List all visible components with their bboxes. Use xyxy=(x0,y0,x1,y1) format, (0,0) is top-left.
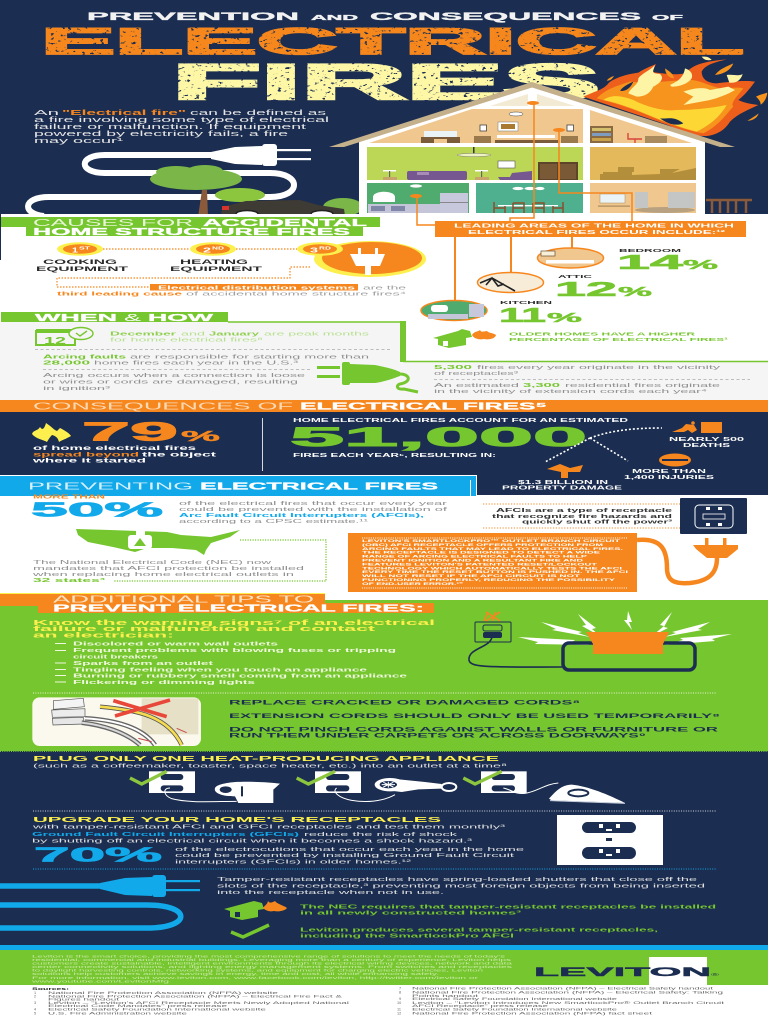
sources: Leviton – "Leviton Introduces New SmartlockPro® Outlet Branch Circuit xyxy=(412,1001,726,1005)
stat text: spread beyond: where it started xyxy=(30,458,147,464)
cord safety tips: DO NOT PINCH CORDS AGAINST WALLS OR FURNITURE OR xyxy=(229,726,719,734)
title word: fires: FIRES xyxy=(172,54,600,110)
stat text: spread beyond xyxy=(30,446,216,464)
sources: 2 xyxy=(34,994,36,998)
area: attic: 12 xyxy=(555,279,617,301)
sources: National Fire Protection Association (NFPA) website xyxy=(48,991,278,995)
stat text: spread beyond: of home electrical fires xyxy=(33,446,198,452)
sources: 5 xyxy=(34,1011,36,1015)
Leviton SmartlockPro box: THE RECEPTACLE IS DESIGNED TO DETECT A WIDE xyxy=(362,550,601,555)
intro text: failure or malfunction. If equipment xyxy=(34,124,306,131)
stat: 50 percent: 50% xyxy=(31,500,164,522)
sources: AFCI Receptacle" press release xyxy=(412,1004,548,1008)
sources xyxy=(32,987,726,1016)
AFCI text xyxy=(179,501,448,525)
heading: upgrade receptacles: UPGRADE YOUR HOME'S RECEPTACLES xyxy=(33,815,442,824)
stat: 51,000 fires xyxy=(290,418,629,459)
Leviton SmartlockPro box xyxy=(348,533,637,592)
heading: plug only one: PLUG ONLY ONE HEAT-PRODUCING APPLIANCE xyxy=(33,754,500,763)
basement storage xyxy=(590,147,696,180)
tamper-resistant text: slots of the receptacle,³ preventing most foreign objects from being inserted xyxy=(217,884,705,890)
kitchen xyxy=(367,183,469,213)
vicinity fire stats: An estimated xyxy=(434,383,519,389)
AFCI text: Arc Fault Circuit Interrupters (AFCIs), xyxy=(179,513,425,519)
Leviton SmartlockPro box: PREVENT IGNITION AND A RESULTANT FIRE AND xyxy=(362,558,583,562)
callout text: third leading cause xyxy=(57,292,182,298)
outcome: property damage xyxy=(502,464,624,492)
GFCI text: Ground Fault Circuit Interrupters (GFCIs) xyxy=(32,832,299,838)
dotted arrows xyxy=(545,428,662,462)
company description: For more information, visit www.leviton.com, www.facebook.com/leviton, http://twitter.com/leviton or xyxy=(32,976,480,980)
panel: Leviton footer xyxy=(0,945,768,985)
icon: third-place plug badge xyxy=(314,241,426,277)
panel: preventing electrical fires xyxy=(0,475,747,592)
house wall xyxy=(359,87,705,216)
warning signs heading: failure or malfunction and contact xyxy=(33,626,377,633)
warning signs list: Frequent problems with blowing fuses or tripping xyxy=(73,648,396,654)
Leviton SmartlockPro box: RANGE OF ARCING ELECTRICAL FAULTS TO HELP xyxy=(362,554,588,559)
leading areas banner: ELECTRICAL FIRES OCCUR INCLUDE:¹² xyxy=(468,229,725,236)
heading: when and how: WHEN xyxy=(35,312,117,324)
NEC text: mandates that AFCI protection be installed xyxy=(33,566,304,572)
GFCI text: by shutting off an electrical circuit when it becomes a shock hazard.³ xyxy=(32,838,472,844)
attic xyxy=(490,94,575,106)
heading: causes: CAUSES FOR xyxy=(33,217,194,229)
arcing faults text: Arcing faults xyxy=(43,354,126,360)
Leviton products text xyxy=(300,928,659,940)
vicinity fire stats: in the vicinity of extension cords each year⁴ xyxy=(434,389,709,395)
heading: upgrade receptacles: with tamper-resistant AFCI and GFCI receptacles and test them monthly³ xyxy=(30,824,505,830)
heading: additional tips xyxy=(0,593,434,614)
arcing faults text: are responsible for starting more than xyxy=(130,354,369,360)
area: kitchen: KITCHEN xyxy=(500,300,554,305)
icon: calendar xyxy=(36,328,93,347)
older homes note xyxy=(509,331,729,343)
heading: upgrade receptacles xyxy=(30,815,505,830)
sources: Electrical Safety Foundation International website xyxy=(412,1008,617,1012)
panel: consequences xyxy=(0,400,768,495)
warning signs list xyxy=(55,642,407,686)
heading: causes: HOME STRUCTURE FIRES xyxy=(33,226,350,238)
icon: outlet with iron xyxy=(463,771,625,803)
company description: solutions help customers achieve savings in energy, time and cost, all while enhancing safety. xyxy=(32,972,439,976)
stat text: spread beyond: the object xyxy=(142,452,216,458)
heading: causes xyxy=(1,217,380,238)
area: kitchen: 11 xyxy=(499,305,546,327)
panel: when and how xyxy=(0,312,768,400)
warning signs heading xyxy=(33,620,435,640)
callout text: are the xyxy=(363,285,406,291)
area: attic xyxy=(478,272,652,301)
NEC text: when replacing home electrical outlets in xyxy=(30,572,294,578)
rank: second xyxy=(170,242,263,273)
GFCI text: reduce the risk of shock xyxy=(304,832,458,838)
heading: causes: ACCIDENTAL xyxy=(203,217,368,229)
icon: white cord and plug xyxy=(28,144,311,216)
AFCI definition: quickly shut off the power³ xyxy=(522,520,673,526)
icon: cyan cord and plug xyxy=(0,875,200,928)
heading: consequences xyxy=(0,400,768,412)
vicinity fire stats: of receptacles³ xyxy=(434,371,519,377)
sources: Points handout xyxy=(412,994,480,998)
Leviton SmartlockPro box: FEATURES LEVITON'S PATENTED RESET/LOCKOUT xyxy=(362,561,598,566)
study xyxy=(590,110,692,143)
dining room xyxy=(476,183,583,213)
Leviton SmartlockPro box: TECHNOLOGY WHICH AUTOMATICALLY TESTS THE AFCI xyxy=(362,565,622,570)
map: united states xyxy=(76,529,240,555)
icon: outlet with hair dryer xyxy=(297,771,456,802)
arcing faults text: home fires each year in the U.S.³ xyxy=(94,360,299,366)
sources: National Fire Protection Association (NFPA) fact sheet xyxy=(412,1012,654,1016)
warning signs heading: an electrician: xyxy=(33,632,174,640)
sources: Electrical Safety Foundation International website xyxy=(48,1008,266,1012)
heading: consequences: CONSEQUENCES OF xyxy=(33,402,293,412)
callout text xyxy=(57,284,408,298)
area: kitchen xyxy=(421,300,582,327)
title word: electrical: ELECTRICAL xyxy=(41,21,744,62)
Leviton SmartlockPro box: FUNCTIONING PROPERLY, REDUCING THE POSSIBILITY xyxy=(362,577,616,582)
intro text: can be defined as xyxy=(190,110,327,117)
area: attic: % xyxy=(618,285,652,299)
heading: preventing: PREVENTING xyxy=(28,480,193,492)
cord safety tips xyxy=(229,700,720,740)
heading: plug only one xyxy=(33,754,509,770)
illustration: tree, car and bush xyxy=(150,165,363,218)
intro text: may occur¹ xyxy=(34,138,125,145)
AFCI definition: that recognize fire hazards and xyxy=(492,514,672,520)
illustration: house cross-section xyxy=(329,82,752,216)
peak months text: December xyxy=(110,331,176,337)
vicinity fire stats: 3,300 xyxy=(523,383,560,389)
callout text: of accidental home structure fires⁴ xyxy=(186,292,408,298)
intro text: An xyxy=(34,110,59,117)
outcome: deaths xyxy=(669,421,745,449)
living room xyxy=(367,147,583,180)
sources: Electrical Safety Foundation International website xyxy=(412,997,617,1001)
stat: 79 percent: % xyxy=(181,429,220,445)
warning signs list: circuit breakers xyxy=(73,654,158,660)
panel: leading areas of the home xyxy=(410,101,746,348)
intro text xyxy=(34,110,330,145)
panel: additional tips xyxy=(0,593,768,751)
leading areas banner: LEADING AREAS OF THE HOME IN WHICH xyxy=(454,224,734,230)
sources: 8 xyxy=(399,991,401,995)
stat: 79 percent xyxy=(82,416,220,446)
AFCI text: according to a CPSC estimate.¹¹ xyxy=(179,519,368,525)
panel: appliances and receptacles xyxy=(0,751,768,945)
stat: 51,000 fires: HOME ELECTRICAL FIRES ACCOUNT FOR AN ESTIMATED xyxy=(293,418,629,424)
arcing faults text: in ignition³ xyxy=(43,386,111,392)
sources: 12 xyxy=(397,1012,401,1016)
panel: causes of accidental home structure fires xyxy=(1,217,426,298)
area: attic: ATTIC xyxy=(558,274,594,279)
sources: National Fire Protection Association (NFPA) – Electrical Fire Fact & xyxy=(48,994,343,998)
peak months text: January xyxy=(209,331,259,337)
header: title xyxy=(41,11,744,110)
vicinity fire stats: residential fires originate xyxy=(565,383,720,389)
rank: first: ST xyxy=(79,246,90,250)
outcome: property damage: PROPERTY DAMAGE xyxy=(502,486,624,492)
company description: residential, commercial and industrial buildings. Leveraging more than a century of experience, Leviton helps xyxy=(32,958,511,962)
dotted connector xyxy=(103,248,297,250)
icon: outlet with kettle xyxy=(130,771,280,803)
outcome: injuries xyxy=(624,454,716,481)
NEC text xyxy=(30,560,304,584)
outcome: injuries: 1,400 INJURIES xyxy=(624,475,716,481)
outcome: injuries: MORE THAN xyxy=(632,469,707,475)
vicinity fire stats: 5,300 xyxy=(434,365,472,371)
warning signs list: Burning or rubbery smell coming from an appliance xyxy=(73,674,407,680)
leading areas banner xyxy=(435,221,746,237)
arcing faults text: 28,000 xyxy=(43,360,90,366)
roof xyxy=(329,82,735,147)
sources: 11 xyxy=(397,1008,401,1012)
heading: additional tips: PREVENT ELECTRICAL FIRES: xyxy=(53,604,424,614)
intro text: a fire involving some type of electrical xyxy=(34,117,330,124)
area: bedroom: % xyxy=(683,258,718,272)
stat text: spread beyond: spread beyond xyxy=(33,452,140,458)
connector lines from rooms xyxy=(410,101,632,225)
arcing faults text xyxy=(43,354,369,392)
company description: Leviton is the smart choice, providing the most comprehensive range of solutions to meet the needs of today's xyxy=(32,954,505,958)
title line: prevention and consequences of xyxy=(87,11,684,23)
area: bedroom: BEDROOM xyxy=(619,248,681,253)
warning signs list: Discolored or warm wall outlets xyxy=(73,642,278,648)
sources: National Fire Protection Association (NFPA) – Electrical Safety handout xyxy=(412,987,715,991)
sources: U.S. Fire Administration website xyxy=(48,1011,187,1015)
heading: when and how: HOW xyxy=(148,312,213,324)
intro text: "Electrical fire" xyxy=(62,110,186,117)
company description xyxy=(32,954,515,983)
Leviton products text: including the SmartlockPro AFCI xyxy=(300,934,515,940)
sources: Leviton – "Leviton's AFCI Receptacle Meets Newly Adopted National xyxy=(48,1001,349,1005)
company description: to daylight harvesting controls, networking systems, and equipment for charging electric vehicles, Leviton xyxy=(32,969,483,973)
rank: second: 2 xyxy=(203,246,211,254)
heading: plug only one: (such as a coffeemaker, toaster, space heater, etc.) into an outlet at a time⁸ xyxy=(33,762,509,770)
stat: 50 percent xyxy=(31,494,164,522)
title line: prevention and consequences of: AND xyxy=(311,13,360,22)
older homes note: OLDER HOMES HAVE A HIGHER xyxy=(509,331,696,337)
rank: second: EQUIPMENT xyxy=(170,267,263,273)
logo: Leviton: LEVITON xyxy=(534,965,711,979)
deck xyxy=(706,200,752,213)
sources: Sources: xyxy=(32,987,69,991)
rank: second: HEATING xyxy=(180,260,249,266)
heading: when and how: & xyxy=(124,312,141,324)
peak months text: are peak months xyxy=(264,331,370,337)
rank: first xyxy=(36,242,129,273)
icon: AFCI receptacle xyxy=(680,498,747,534)
arcing faults text: Arcing occurs when a connection is loose xyxy=(43,373,305,379)
cord safety tips: RUN THEM UNDER CARPETS OR ACROSS DOORWAYS⁹ xyxy=(229,732,646,740)
sources: 1 xyxy=(34,991,36,995)
cord safety tips: EXTENSION CORDS SHOULD ONLY BE USED TEMPORARILY⁸ xyxy=(229,713,720,720)
illustration: overloaded power strip xyxy=(32,697,201,746)
intro text: powered by electricity fails, a fire xyxy=(34,131,288,138)
Leviton products text: Leviton produces several tamper-resistant receptacles, xyxy=(300,928,659,934)
NEC text: 32 states³ xyxy=(33,577,105,584)
lounge room xyxy=(590,183,696,213)
stat: 51,000 fires: FIRES EACH YEAR⁵, RESULTING IN: xyxy=(293,453,497,459)
icon: large white outlet xyxy=(557,815,663,865)
older homes note: PERCENTAGE OF ELECTRICAL FIRES¹ xyxy=(509,337,729,343)
bedroom xyxy=(369,109,583,143)
title line: prevention and consequences of: CONSEQUENCES xyxy=(370,11,641,23)
callout connector xyxy=(57,267,310,287)
stat: 70 percent: 70% xyxy=(34,844,163,866)
AFCI definition: AFCIs are a type of receptacle xyxy=(496,508,672,514)
electrocution text: of the electrocutions that occur each year in the home xyxy=(175,847,524,853)
heading: additional tips: ADDITIONAL TIPS TO xyxy=(53,594,315,606)
Leviton SmartlockPro box: ARCING FAULTS THAT MAY LEAD TO ELECTRICAL FIRES. xyxy=(362,546,623,551)
Leviton SmartlockPro box: OF END-USER ERROR.¹⁰ xyxy=(362,581,464,586)
Leviton SmartlockPro box: EVERY TIME THE RESET BUTTON IS PUSHED IN. THE AFCI xyxy=(362,569,628,574)
Leviton SmartlockPro box: (OBC) AFCI RECEPTACLE OFFERS PROTECTION FROM xyxy=(362,542,604,547)
rank: second: ND xyxy=(212,246,225,250)
tamper-resistant text xyxy=(217,877,705,896)
peak months text xyxy=(110,331,370,343)
illustration: flames on roof xyxy=(583,57,767,136)
rank: third xyxy=(297,242,343,256)
sources: 3 xyxy=(34,1001,36,1005)
rank: first: 1 xyxy=(72,246,78,254)
GFCI text xyxy=(32,832,472,844)
warning signs heading: Know the warning signs⁷ of an electrical xyxy=(33,620,435,627)
arcing faults text: or wires or cords are damaged, resulting xyxy=(43,380,298,386)
vicinity fire stats: fires every year originate in the vicinity xyxy=(477,365,721,371)
sources: Electrical Code Mandates" press release xyxy=(48,1004,227,1008)
NEC requirement text: The NEC requires that tamper-resistant receptacles be installed xyxy=(300,904,716,910)
Leviton SmartlockPro box: WILL NOT RESET IF THE AFCI CIRCUIT IS NOT xyxy=(362,573,581,578)
stat: 79 percent: 79 xyxy=(82,416,178,446)
heading: preventing xyxy=(0,475,477,496)
rank: third: 3 xyxy=(310,246,318,254)
title line: prevention and consequences of: OF xyxy=(652,13,684,22)
peak months text: for home electrical fires⁸ xyxy=(110,337,263,343)
icon: overheated toaster xyxy=(469,611,732,670)
icon: green check xyxy=(231,925,269,937)
NEC requirement text: in all newly constructed homes³ xyxy=(300,910,522,916)
electrocution text xyxy=(175,847,524,866)
sources: Figures handout xyxy=(48,998,121,1002)
title line: prevention and consequences of: PREVENTION xyxy=(87,11,299,23)
icon: yellow flame xyxy=(32,423,71,442)
sources: 7 xyxy=(399,987,401,991)
NEC requirement text xyxy=(300,904,716,916)
AFCI text: could be prevented with the installation of xyxy=(179,507,448,513)
icon: older home on fire xyxy=(433,329,496,348)
warning signs list: Tingling feeling when you touch an appliance xyxy=(73,668,367,674)
outcome: property damage: $1.3 BILLION IN xyxy=(518,480,609,486)
warning signs list: Flickering or dimming lights xyxy=(73,680,255,686)
company description: center connectivity solutions, and lighting energy management systems. From switches and receptacles xyxy=(32,965,512,969)
area: bedroom xyxy=(538,248,718,274)
tamper-resistant text: Tamper-resistant receptacles have spring-loaded shutters that close off the xyxy=(217,877,697,883)
sources: National Fire Protection Association (NFPA) – Electrical Safety: Talking xyxy=(412,991,723,995)
callout text: Electrical distribution systems xyxy=(158,285,355,291)
outcome: deaths: DEATHS xyxy=(683,443,732,449)
electrocution text: interrupters (GFCIs) in older homes.¹² xyxy=(175,860,411,866)
peak months text: and xyxy=(181,331,205,337)
Leviton SmartlockPro box: LEVITON'S SMARTLOCKPRO™ OUTLET BRANCH CIRCUIT xyxy=(362,538,621,543)
outcome: deaths: NEARLY 500 xyxy=(669,437,745,443)
stat: 50 percent: MORE THAN xyxy=(33,494,106,500)
stat: 51,000 fires: 51,000 xyxy=(290,422,587,452)
sources: 4 xyxy=(34,1008,36,1012)
cord safety tips: REPLACE CRACKED OR DAMAGED CORDS⁸ xyxy=(229,700,580,706)
sources: 10 xyxy=(397,1001,401,1005)
vicinity fire stats xyxy=(434,365,721,395)
NEC text: The National Electrical Code (NEC) now xyxy=(33,560,273,566)
icon: green house with flame xyxy=(224,901,287,920)
logo: Leviton xyxy=(534,957,719,985)
icon: calendar: 12 xyxy=(44,336,67,347)
heading: consequences: ELECTRICAL FIRES⁵ xyxy=(300,402,548,412)
area: kitchen: % xyxy=(547,311,582,325)
logo: Leviton: ® xyxy=(711,972,719,977)
area: bedroom: 14 xyxy=(617,252,686,274)
icon: orange cord and plug xyxy=(637,538,738,583)
heading: when and how xyxy=(1,312,228,324)
tamper-resistant text: into the receptacle when not in use. xyxy=(217,890,445,896)
company description: customers create sustainable, intelligent environments through its electrical wiring devices, network and data xyxy=(32,962,515,966)
AFCI text: of the electrical fires that occur every year xyxy=(179,501,447,507)
rank: third: RD xyxy=(319,246,332,250)
electrocution text: could be prevented by installing Ground Fault Circuit xyxy=(175,853,515,859)
rank: first: COOKING xyxy=(43,260,118,266)
AFCI definition xyxy=(492,508,673,526)
heading: preventing: ELECTRICAL FIRES xyxy=(200,480,438,492)
warning signs list: Sparks from an outlet xyxy=(73,661,214,667)
sources: 9 xyxy=(399,997,401,1001)
rank: first: EQUIPMENT xyxy=(36,267,129,273)
company description: www.youtube.com/LevitonMfg xyxy=(32,979,169,983)
icon: green plug xyxy=(317,362,418,392)
